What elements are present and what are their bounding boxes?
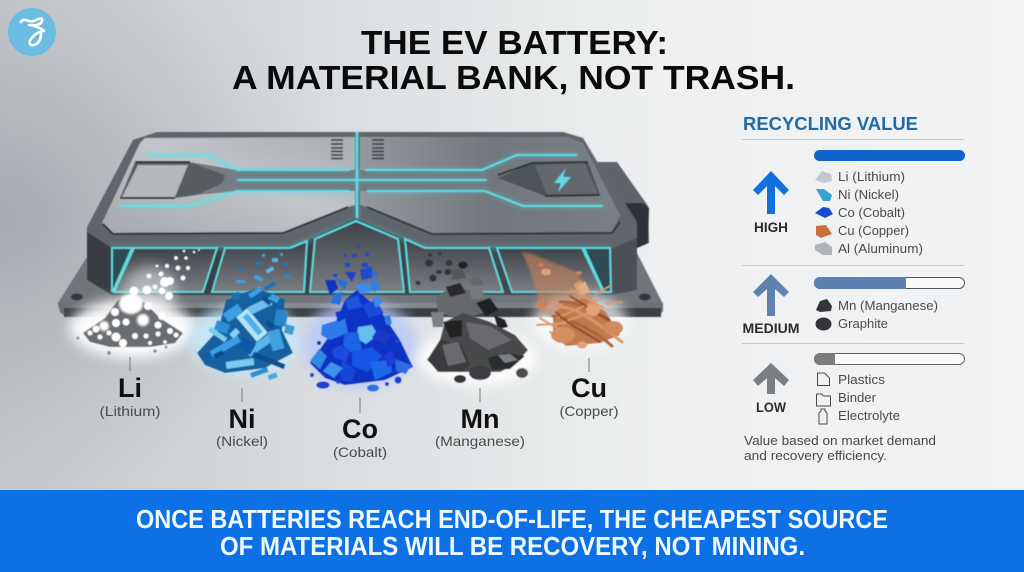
plate shadow lines: [103, 207, 620, 234]
cobalt chunks: [310, 266, 411, 382]
element label: copper: [560, 358, 618, 419]
element label: nickel: (Nickel): [216, 433, 268, 449]
tier: high: [742, 139, 965, 256]
icon: lightning bolt: [554, 168, 571, 192]
base plate: [58, 253, 663, 317]
high material list: Ni (Nickel): [838, 187, 899, 202]
manganese heap: [427, 313, 528, 372]
title: A MATERIAL BANK, NOT TRASH.: [232, 59, 795, 96]
low material list: Electrolyte: [838, 408, 900, 423]
material pile: copper: [522, 252, 628, 350]
high arrow: [753, 171, 789, 214]
copper nuggets: [551, 281, 623, 348]
tier: low: [742, 343, 964, 424]
centre channel: [190, 162, 482, 195]
cell windows: [112, 221, 611, 292]
logo badge: [8, 8, 56, 56]
battery body front: [87, 200, 637, 295]
manganese falling particles: [416, 252, 528, 383]
note: [744, 434, 936, 463]
high value bar: [814, 150, 965, 161]
element label: copper: (Copper): [560, 403, 618, 419]
panel heading: RECYCLING VALUE: [743, 113, 918, 134]
low material list: Binder: [838, 390, 877, 405]
note: Value based on market demand: [744, 434, 936, 448]
title: THE EV BATTERY:: [361, 24, 668, 61]
lithium debris: [76, 336, 168, 355]
right module: [498, 162, 600, 196]
high material list: Al (Aluminum): [838, 241, 923, 256]
banner: [0, 490, 1024, 572]
left module: [120, 162, 225, 198]
element label: cobalt: (Cobalt): [333, 444, 387, 460]
material pile: cobalt: [302, 246, 418, 392]
high material list: Co (Cobalt): [838, 205, 905, 220]
low material list: Plastics: [838, 372, 886, 387]
medium material list: Graphite: [838, 316, 888, 331]
cobalt heap: [310, 290, 413, 385]
nickel falling particles: [231, 253, 290, 303]
cyan circuit glow: [112, 132, 610, 248]
right top plate: [360, 137, 620, 233]
low value bar: [814, 353, 964, 365]
illustration: EV battery pack: [58, 132, 663, 317]
high material list: Cu (Copper): [838, 223, 909, 238]
medium value bar: [814, 277, 964, 289]
banner text: OF MATERIALS WILL BE RECOVERY, NOT MINING.: [220, 531, 805, 561]
tier: medium: [742, 265, 964, 336]
material pile: manganese: [416, 252, 538, 386]
element label: manganese: [435, 388, 525, 449]
element label: lithium: Li: [118, 373, 142, 403]
high label: HIGH: [754, 220, 788, 235]
manganese upper rocks: [431, 268, 508, 329]
element label: nickel: [216, 388, 268, 449]
cobalt glow: [302, 301, 418, 389]
low material list: [838, 372, 900, 423]
element label: copper: Cu: [571, 373, 607, 403]
material pile: lithium: [70, 249, 200, 358]
low arrow: [753, 363, 789, 394]
element label: lithium: [100, 357, 160, 419]
low label: LOW: [756, 400, 786, 415]
high material icons: [815, 171, 833, 255]
element label: cobalt: Co: [342, 414, 378, 444]
lithium heap: [83, 296, 183, 347]
element label: manganese: (Manganese): [435, 433, 525, 449]
copper dust cloud: [522, 252, 595, 320]
cobalt falling particles: [310, 246, 402, 392]
manganese glow: [418, 330, 538, 386]
banner text: [136, 504, 888, 561]
nickel heap: [197, 288, 293, 373]
medium material list: [838, 298, 938, 331]
banner text: ONCE BATTERIES REACH END-OF-LIFE, THE CHEAPEST SOURCE: [136, 504, 888, 534]
medium arrow: [753, 274, 789, 316]
cyan circuit lines: [120, 132, 603, 218]
panel: recycling value: [742, 113, 965, 463]
medium material icons: [816, 299, 832, 330]
medium material list: Mn (Manganese): [838, 298, 938, 313]
nickel shards: [208, 295, 295, 380]
element label: manganese: Mn: [461, 404, 499, 434]
copper core: [553, 298, 620, 346]
vents: [331, 140, 384, 158]
element label: nickel: Ni: [228, 404, 256, 434]
lithium crystals: [88, 249, 200, 347]
element label: cobalt: [333, 398, 387, 460]
manganese rocks: [428, 320, 525, 372]
lithium glow: [70, 266, 194, 358]
left top plate: [102, 137, 355, 233]
nickel glow: [189, 304, 301, 376]
title: [232, 24, 795, 96]
copper glow: [532, 294, 628, 350]
top casing: [87, 132, 637, 248]
high material list: [838, 169, 923, 256]
high material list: Li (Lithium): [838, 169, 905, 184]
material pile: nickel: [189, 253, 301, 380]
note: and recovery efficiency.: [744, 449, 887, 463]
battery connector: [596, 162, 649, 248]
low material icons: [816, 373, 830, 424]
copper wires: [537, 286, 622, 346]
medium label: MEDIUM: [742, 321, 800, 336]
element label: lithium: (Lithium): [100, 403, 160, 419]
